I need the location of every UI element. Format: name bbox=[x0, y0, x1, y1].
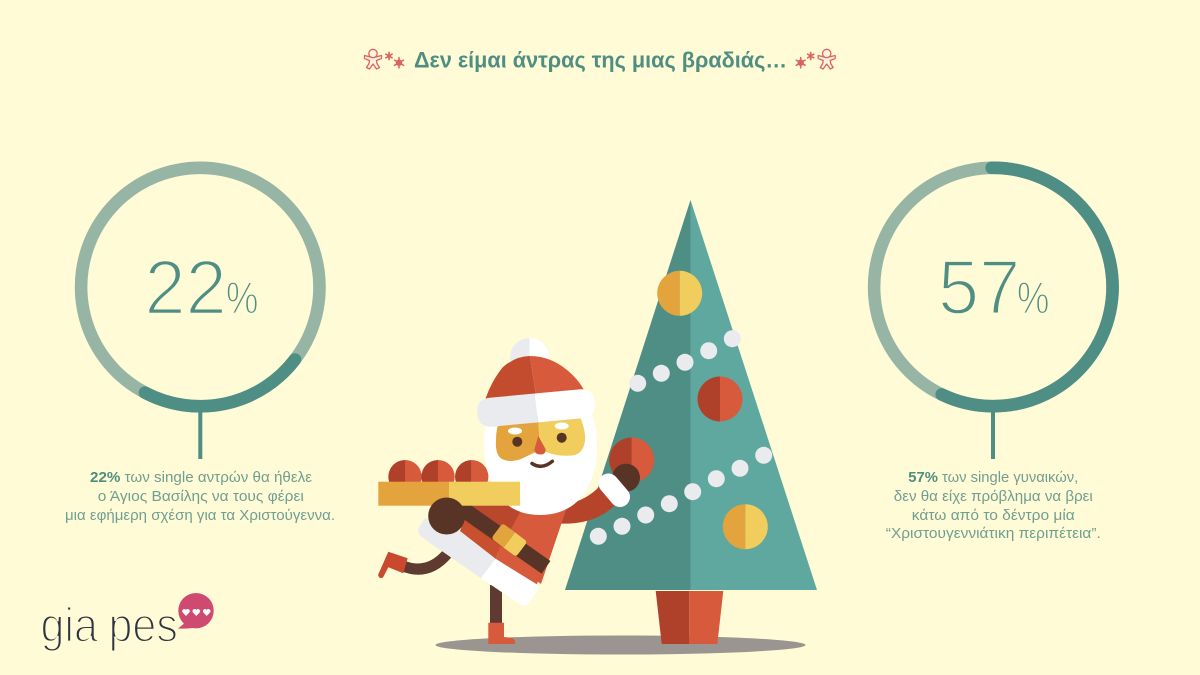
buckle bbox=[491, 523, 527, 557]
coat bbox=[460, 503, 566, 584]
right arm bbox=[548, 484, 618, 524]
smile bbox=[532, 461, 552, 466]
description: ο Άγιος Βασίλης να τους φέρει bbox=[98, 488, 304, 505]
baubles on tray bbox=[388, 460, 488, 493]
panel: men statistic bbox=[65, 168, 335, 524]
logo wordmark bbox=[40, 597, 178, 652]
value 57%: % bbox=[1017, 273, 1049, 323]
beard bbox=[484, 400, 597, 515]
icon: gingerbread right bbox=[818, 49, 835, 69]
garland lower bbox=[590, 447, 772, 545]
connector line bbox=[991, 412, 995, 459]
description: μια εφήμερη σχέση για τα Χριστούγεννα. bbox=[65, 507, 335, 524]
nose bbox=[534, 436, 546, 454]
description bbox=[65, 469, 335, 524]
face mask bbox=[496, 412, 585, 461]
description: δεν θα είχε πρόβλημα να βρει bbox=[894, 488, 1093, 505]
garland upper bbox=[629, 330, 741, 392]
value 22%: 22 bbox=[144, 245, 227, 330]
icon: snow left bbox=[386, 52, 404, 68]
value 22%: % bbox=[226, 273, 258, 323]
logo speech bubble bbox=[178, 593, 214, 629]
panel: women statistic bbox=[874, 168, 1113, 542]
eye highlights bbox=[508, 422, 569, 434]
bauble middle red bbox=[698, 376, 742, 422]
cuff bbox=[608, 484, 620, 497]
bauble top yellow bbox=[657, 271, 702, 316]
held bauble bbox=[609, 438, 654, 482]
logo wordmark: gia bbox=[40, 597, 98, 652]
illustration: christmas tree bbox=[565, 200, 817, 644]
ring chart 22% bbox=[81, 168, 320, 406]
description: “Χριστουγεννιάτικη περιπέτεια”. bbox=[886, 525, 1101, 542]
description: 22% των single αντρών θα ήθελε bbox=[90, 469, 312, 486]
ground shadow bbox=[436, 636, 806, 654]
icon: snow right bbox=[796, 52, 814, 68]
hat pompom bbox=[510, 338, 549, 377]
ring chart 57% bbox=[874, 168, 1113, 406]
value 57%: 57 bbox=[938, 245, 1020, 330]
hat bbox=[485, 356, 584, 400]
bauble bottom yellow bbox=[723, 504, 768, 549]
connector line bbox=[198, 412, 202, 459]
belt bbox=[452, 502, 546, 567]
illustration: santa bbox=[378, 338, 654, 644]
title: Δεν είμαι άντρας της μιας βραδιάς… bbox=[414, 48, 787, 72]
logo wordmark: pes bbox=[108, 597, 178, 652]
tree body bbox=[565, 200, 817, 590]
coat red band bbox=[460, 520, 542, 584]
tree pot bbox=[656, 591, 723, 644]
description bbox=[886, 469, 1101, 542]
icon: gingerbread left bbox=[364, 49, 382, 69]
description: 57% των single γυναικών, bbox=[908, 469, 1078, 486]
tray bbox=[378, 482, 520, 506]
standing leg and boot bbox=[488, 585, 515, 644]
hat brim bbox=[476, 388, 596, 428]
hand holding tray bbox=[428, 498, 465, 534]
hand raised bbox=[612, 464, 640, 492]
eyes bbox=[512, 433, 567, 447]
description: κάτω από το δέντρο μία bbox=[912, 507, 1075, 524]
coat fur trim bbox=[418, 518, 538, 606]
raised leg and boot bbox=[378, 552, 447, 578]
logo bbox=[40, 593, 214, 652]
